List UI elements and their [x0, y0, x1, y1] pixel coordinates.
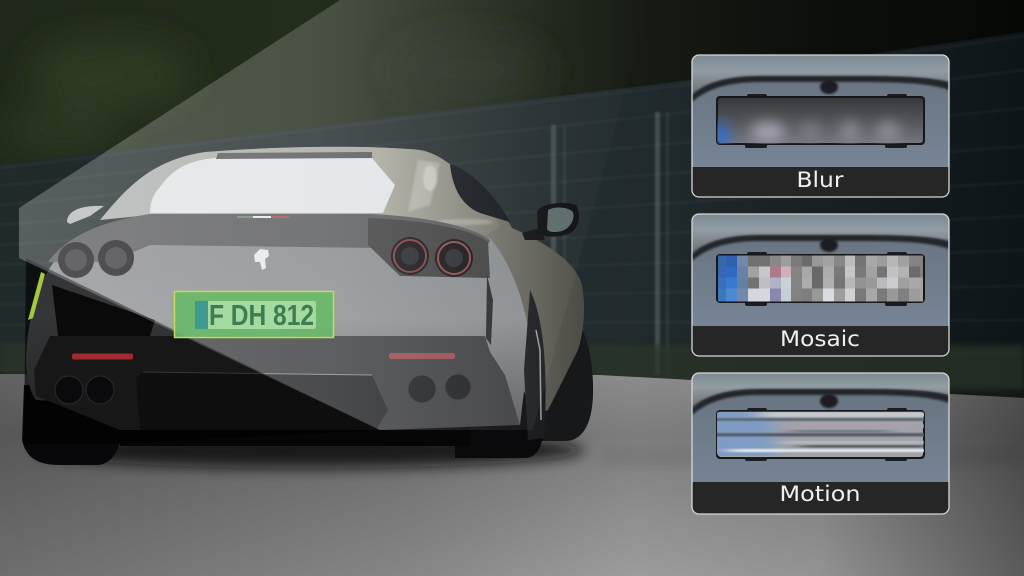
prancing horse emblem [254, 249, 269, 270]
detected license plate highlight [174, 292, 334, 338]
main body shell [26, 214, 530, 425]
left taillights [58, 240, 134, 278]
plate on car [195, 301, 316, 329]
diffuser [136, 372, 388, 430]
detection beam from plate [19, 0, 650, 430]
motion-blurred plate [716, 410, 925, 459]
label: Motion: Motion [780, 482, 860, 506]
left rear tyre [22, 385, 122, 465]
panel: Blur [692, 55, 949, 197]
panel border [692, 214, 949, 356]
panel border [692, 373, 949, 514]
camera bump [820, 80, 838, 94]
label band [692, 482, 949, 514]
label band [692, 326, 949, 356]
camera bump [820, 394, 838, 408]
right reflector [389, 353, 455, 359]
wheel arch and rim [524, 290, 546, 440]
car shadow on the road [35, 432, 585, 468]
right body seam [486, 275, 493, 345]
green reflection on left flank [28, 272, 45, 320]
right taillights [391, 237, 473, 277]
rear wing spoiler [216, 152, 372, 159]
label: Blur: Blur [796, 168, 844, 192]
mosaic plate [716, 254, 925, 303]
left reflector [72, 354, 133, 360]
blurred plate [712, 96, 925, 148]
plate mounts [745, 252, 907, 306]
green detection box [174, 292, 334, 338]
plate number: F DH 812 [209, 300, 314, 332]
left inner bumper recess [52, 285, 155, 336]
roof and hips [100, 147, 500, 240]
label band [692, 167, 949, 197]
right flank [440, 160, 584, 415]
camera bump [820, 238, 838, 252]
lower bumper [34, 336, 520, 430]
label: Mosaic: Mosaic [780, 327, 860, 351]
right rear tyre [455, 380, 545, 458]
car, rear view [22, 147, 593, 465]
panel border [692, 55, 949, 197]
rear windscreen [150, 158, 395, 213]
plate mounts [745, 94, 907, 148]
hip highlights [408, 160, 493, 225]
right exhaust [408, 374, 471, 403]
panel: Motion [692, 373, 949, 514]
right door mirror [522, 203, 579, 240]
panel: Mosaic [692, 214, 949, 356]
far right tyre [540, 300, 593, 441]
body darkening below the light beam [24, 258, 380, 444]
side window [450, 164, 510, 222]
plate mounts [745, 408, 907, 461]
left door mirror [67, 206, 104, 224]
Italian flag strip [237, 216, 289, 218]
left exhaust [55, 376, 114, 404]
right taillight housing [368, 218, 490, 278]
rear deck band [48, 214, 490, 265]
underbody [120, 400, 470, 446]
